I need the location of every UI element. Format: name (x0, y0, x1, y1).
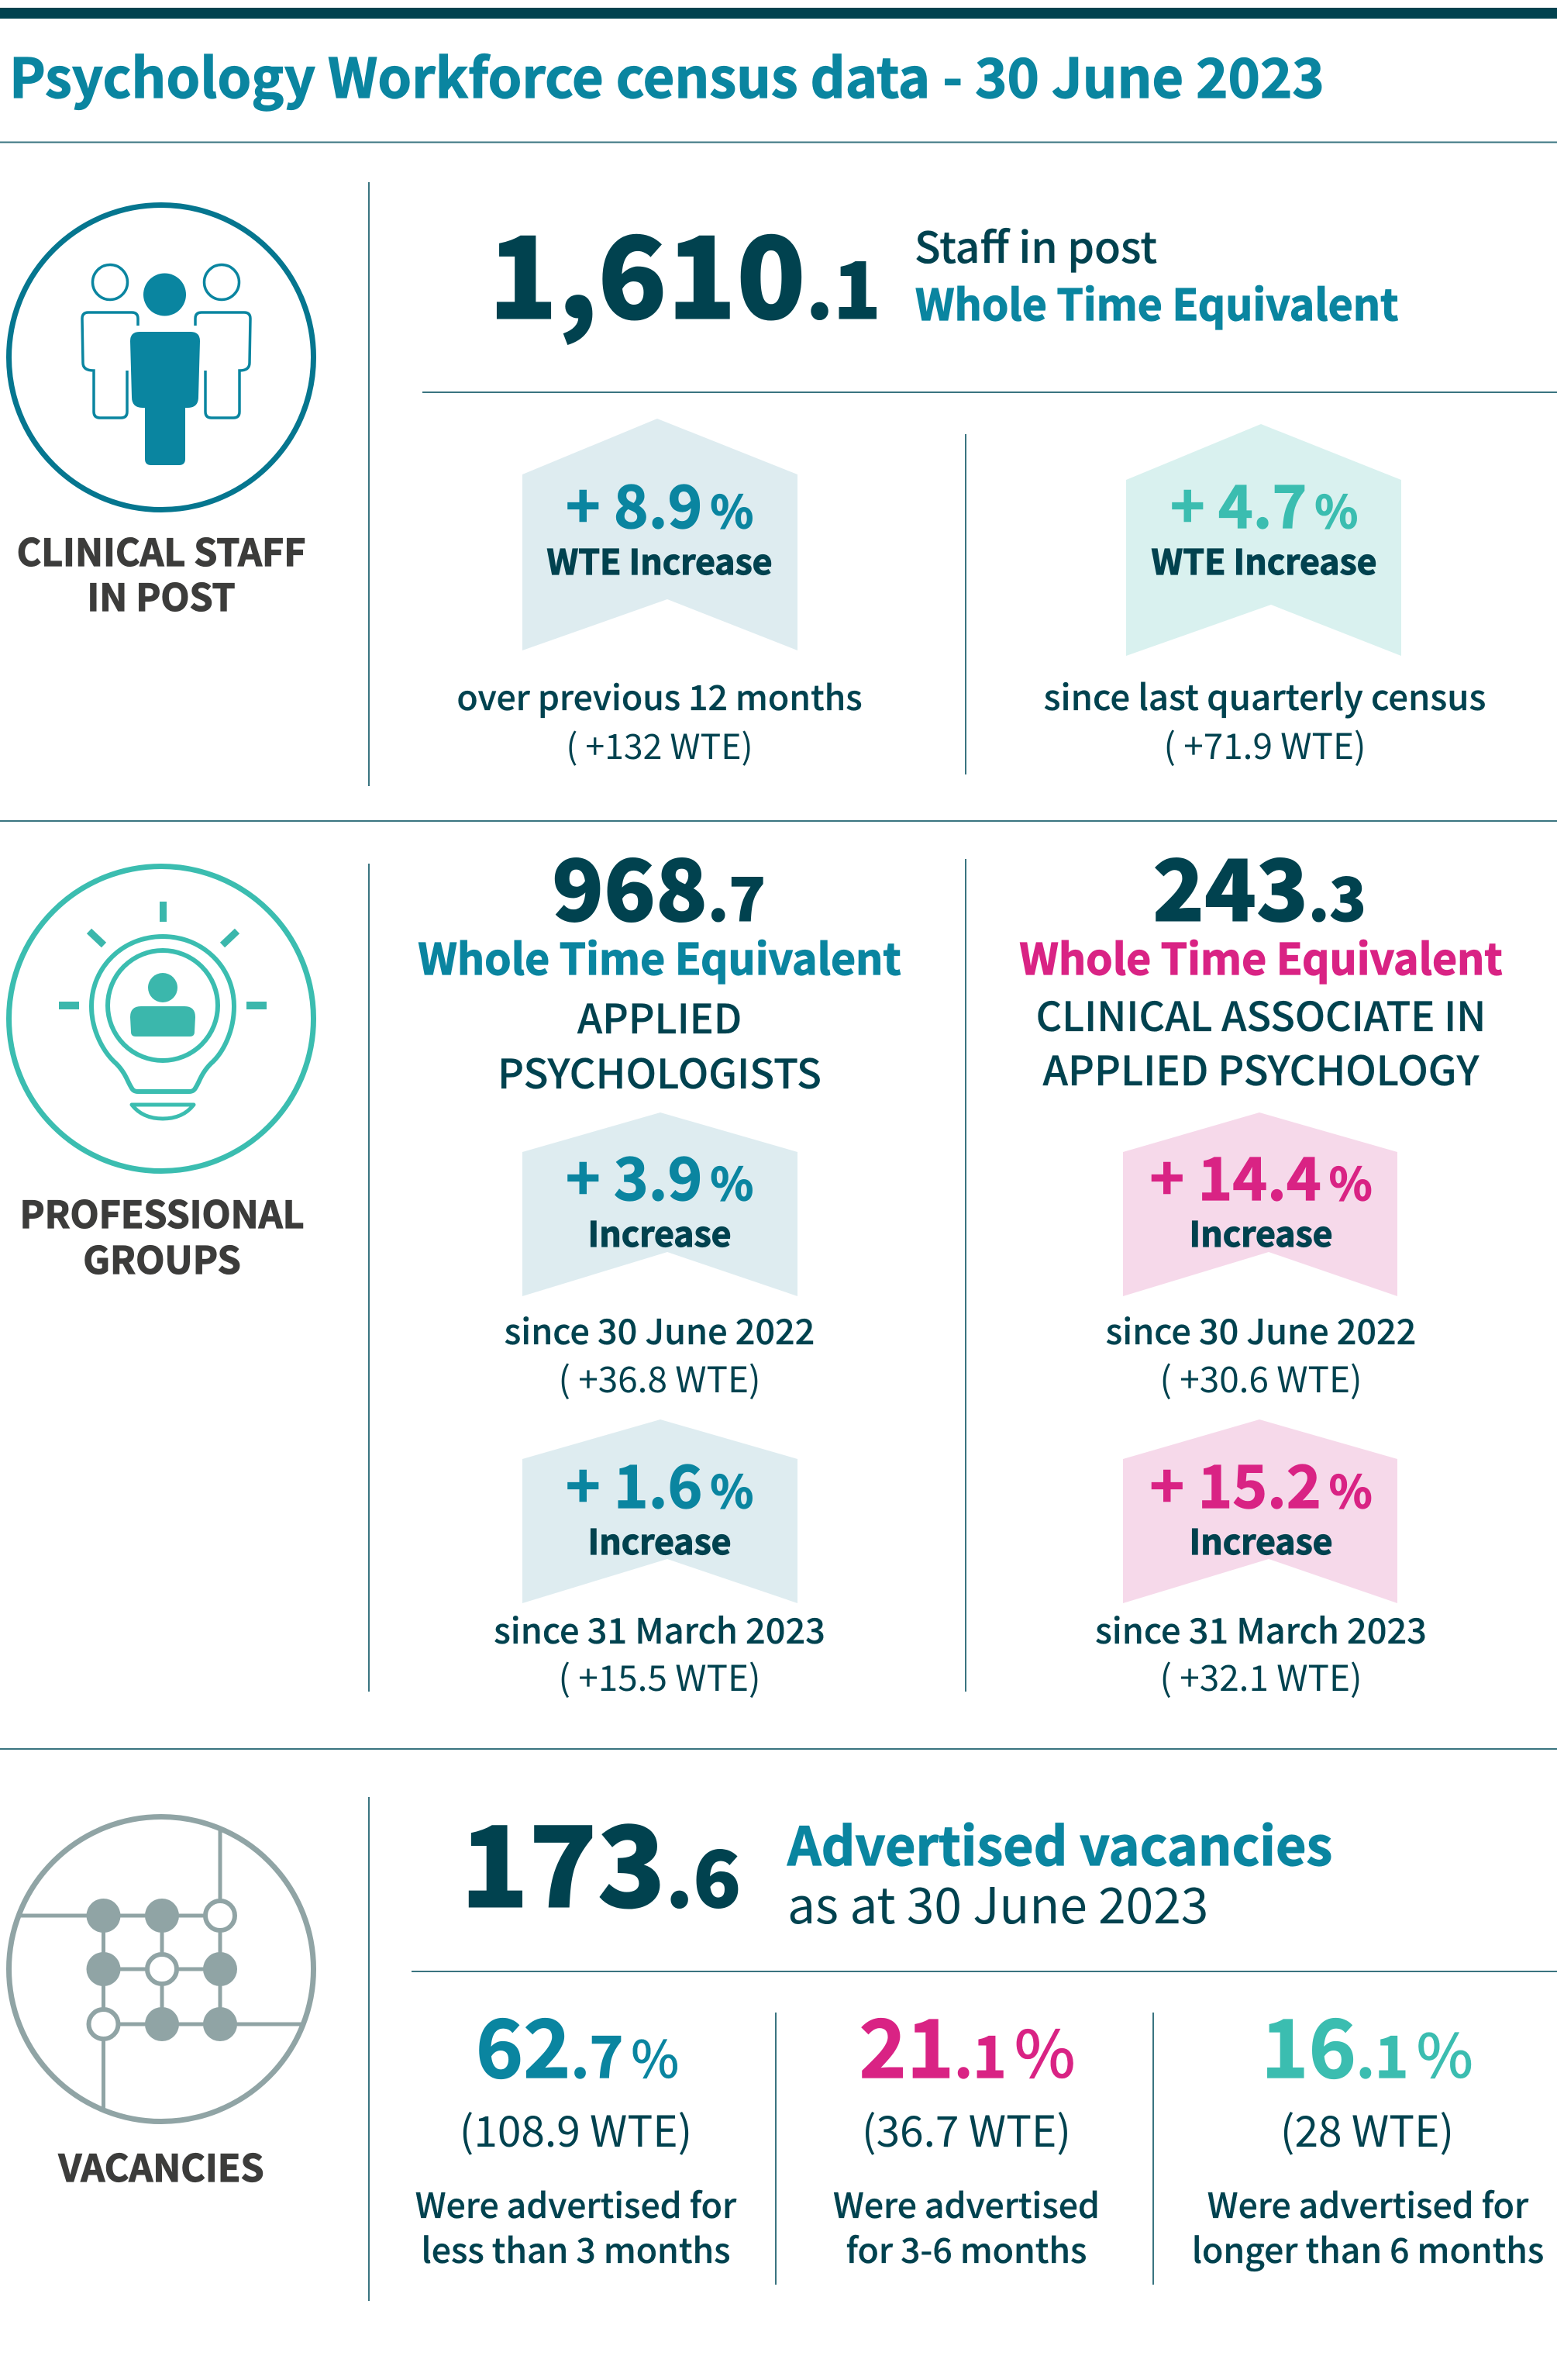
callout: 3.9 percent increase (505, 1112, 815, 1403)
stat: 243.3: 243.3 (1152, 822, 1366, 946)
callout: 8.9 percent increase: WTE Increase (547, 534, 772, 585)
callout: 4.7 percent increase: WTE Increase (1152, 534, 1376, 585)
stat: longer than 6 months: 16.1% (1261, 1984, 1473, 2101)
callout: 15.2 percent increase: since 31 March 2023 (1095, 1603, 1427, 1654)
stat: less than 3 months: less than 3 months (422, 2223, 730, 2273)
callout: 15.2 percent increase (1095, 1419, 1427, 1702)
callout: 3.9 percent increase: + 3.9% (566, 1132, 753, 1217)
stat: longer than 6 months: longer than 6 months (1192, 2223, 1544, 2273)
stat: longer than 6 months (1192, 1984, 1544, 2273)
heading: applied psychology: APPLIED PSYCHOLOGY (1042, 1039, 1480, 1098)
callout: 14.4 percent increase: since 30 June 2022 (1106, 1304, 1416, 1354)
callout: 8.9 percent increase: ( +132 WTE) (566, 719, 753, 769)
caption: advertised vacancies: Advertised vacancies (787, 1804, 1332, 1881)
callout: 3.9 percent increase: since 30 June 2022 (505, 1304, 815, 1354)
callout: 1.6 percent increase: since 31 March 2023 (494, 1603, 825, 1654)
stat: less than 3 months (415, 1984, 737, 2273)
caption: whole time equivalent: Whole Time Equivalent (1019, 925, 1503, 987)
callout: 15.2 percent increase: Increase (1190, 1514, 1332, 1564)
callout: 14.4 percent increase (1106, 1112, 1416, 1403)
title: Psychology Workforce census data - 30 June 2023 (9, 36, 1324, 114)
callout: 4.7 percent increase: ( +71.9 WTE) (1163, 719, 1366, 770)
stat: staff in post total: 1,610.1 (488, 187, 881, 352)
caption: whole time equivalent: Whole Time Equivalent (915, 271, 1398, 333)
icon: light bulb with person (9, 867, 313, 1171)
callout: 14.4 percent increase: Increase (1190, 1206, 1332, 1257)
callout: 3.9 percent increase: Increase (588, 1206, 731, 1257)
stat: less than 3 months: 62.7% (476, 1984, 679, 2101)
callout: 8.9 percent increase (456, 419, 863, 769)
callout: 15.2 percent increase: ( +32.1 WTE) (1159, 1650, 1362, 1702)
stat: 3-6 months: 21.1% (859, 1984, 1076, 2101)
heading: applied psychologists, second line: PSYCHOLOGISTS (498, 1042, 822, 1101)
label: vacancies: VACANCIES (57, 2138, 264, 2192)
panel: vacancies (9, 1817, 313, 2192)
stat: 968.7: 968.7 (552, 822, 766, 946)
heading: applied psychologists: APPLIED (577, 987, 742, 1045)
stat: 3-6 months: (36.7 WTE) (862, 2097, 1071, 2159)
caption: as at 30 June 2023: as at 30 June 2023 (787, 1867, 1208, 1938)
label: clinical staff in post, second line: IN POST (87, 567, 236, 622)
caption: staff in post: Staff in post (915, 213, 1157, 275)
stat: 3-6 months: Were advertised (833, 2178, 1100, 2228)
callout: 14.4 percent increase: ( +30.6 WTE) (1159, 1352, 1362, 1403)
heading: clinical associate in: CLINICAL ASSOCIATE IN (1036, 985, 1486, 1043)
label: clinical staff in post: CLINICAL STAFF (17, 523, 305, 577)
callout: 4.7 percent increase: since last quarterly census (1044, 670, 1486, 721)
stat: longer than 6 months: (28 WTE) (1280, 2097, 1454, 2159)
callout: 1.6 percent increase (494, 1419, 825, 1702)
callout: 1.6 percent increase: ( +15.5 WTE) (558, 1650, 761, 1702)
stat: 3-6 months (833, 1984, 1100, 2273)
callout: 1.6 percent increase: + 1.6% (566, 1440, 753, 1525)
panel: applied psychologists (418, 822, 901, 1702)
stat: advertised vacancies total: 173.6 (460, 1777, 741, 1940)
callout: 8.9 percent increase: over previous 12 months (456, 670, 863, 720)
stat: less than 3 months: (108.9 WTE) (460, 2097, 692, 2159)
top bar (0, 8, 1557, 19)
stat: longer than 6 months: Were advertised for (1207, 2178, 1529, 2228)
panel: clinical associate in applied psychology (1019, 822, 1503, 1702)
callout: 4.7 percent increase (1044, 424, 1486, 770)
icon: network of nodes (9, 1817, 313, 2121)
icon: group of people (9, 205, 313, 510)
label: professional groups: PROFESSIONAL (20, 1185, 304, 1239)
callout: 1.6 percent increase: Increase (588, 1514, 731, 1564)
stat: less than 3 months: Were advertised for (415, 2178, 737, 2228)
panel: professional groups (9, 867, 313, 1285)
caption: whole time equivalent: Whole Time Equivalent (418, 925, 901, 987)
panel: clinical staff in post (9, 205, 313, 622)
stat: 3-6 months: for 3-6 months (846, 2223, 1087, 2273)
callout: 3.9 percent increase: ( +36.8 WTE) (558, 1352, 761, 1403)
callout: 14.4 percent increase: + 14.4% (1149, 1132, 1373, 1217)
callout: 4.7 percent increase: + 4.7% (1170, 460, 1358, 545)
callout: 8.9 percent increase: + 8.9% (566, 460, 753, 545)
callout: 15.2 percent increase: + 15.2% (1149, 1440, 1373, 1525)
label: professional groups, second line: GROUPS (83, 1230, 241, 1285)
